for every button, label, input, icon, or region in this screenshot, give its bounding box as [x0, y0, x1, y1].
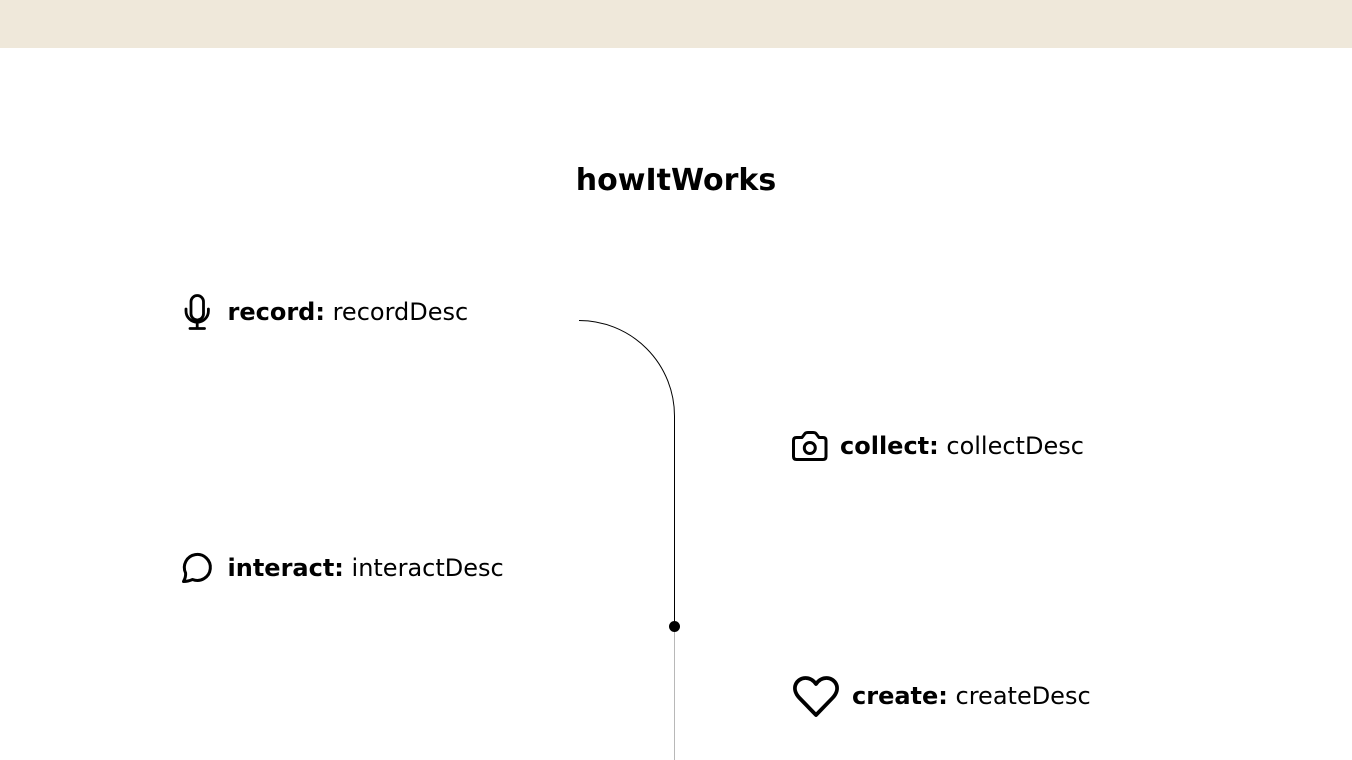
step: record: record: recordDesc	[228, 298, 468, 326]
title: howItWorks	[576, 163, 776, 198]
step: collect: collect: collectDesc	[840, 432, 1084, 460]
top band	[0, 0, 1352, 48]
step: create: create: createDesc	[852, 682, 1091, 710]
timeline marker dot	[669, 621, 680, 632]
timeline progress curve	[579, 320, 674, 626]
timeline remaining line	[674, 626, 676, 760]
step: interact: interact: interactDesc	[228, 554, 504, 582]
